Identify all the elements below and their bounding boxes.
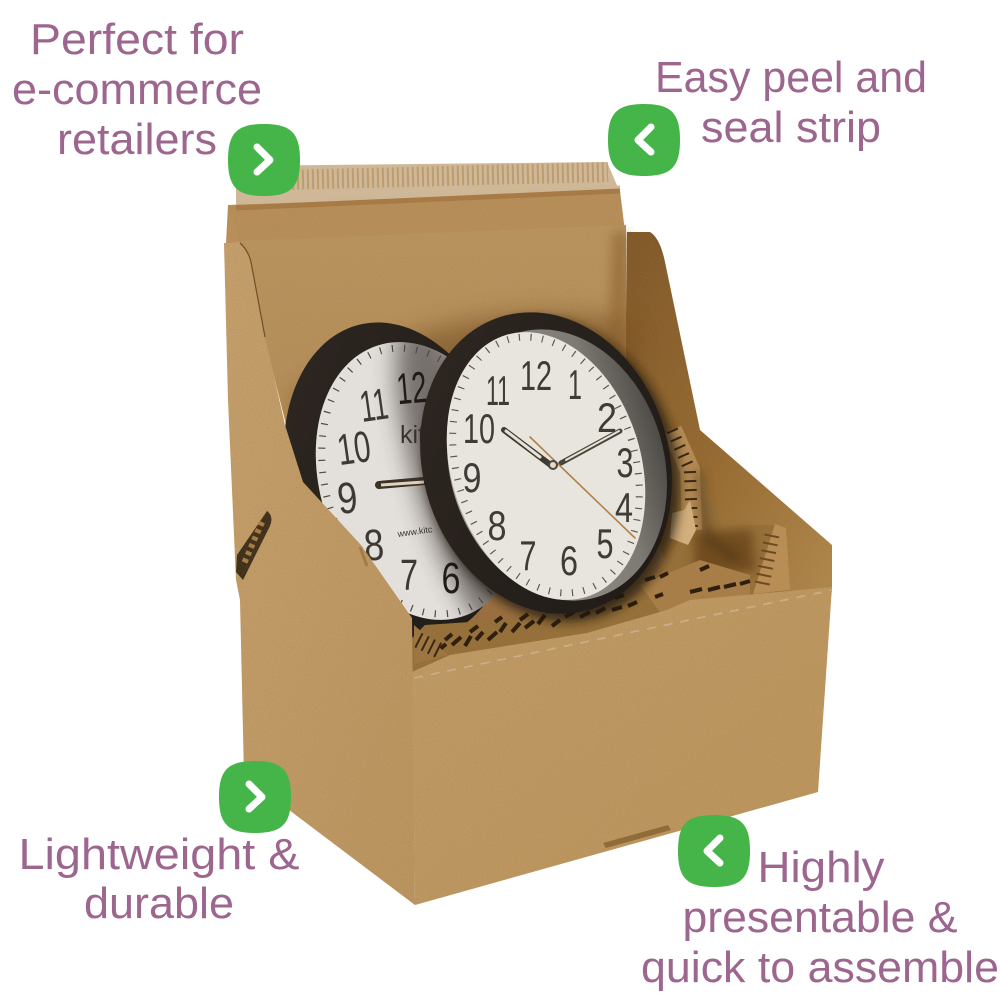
front clock numerals: 9 bbox=[462, 454, 482, 501]
back clock numerals: 10 bbox=[334, 422, 374, 475]
front clock numerals: 8 bbox=[488, 502, 506, 549]
front face bbox=[412, 587, 832, 905]
front clock numerals: 2 bbox=[597, 394, 617, 441]
back clock bbox=[285, 322, 496, 638]
right inner flap bbox=[625, 232, 832, 630]
back clock numerals: 7 bbox=[400, 551, 418, 600]
front clock numerals: 11 bbox=[486, 367, 510, 414]
front clock numerals bbox=[462, 352, 634, 584]
peel and seal strip bbox=[236, 162, 620, 210]
back clock numerals: 8 bbox=[362, 520, 386, 571]
front clock numerals: 1 bbox=[568, 361, 582, 408]
label bbox=[641, 843, 999, 992]
label bbox=[12, 15, 262, 164]
back inner panel bbox=[240, 225, 680, 640]
back clock numerals: 6 bbox=[442, 554, 460, 603]
front clock hands bbox=[504, 430, 635, 538]
front clock numerals: 12 bbox=[520, 352, 552, 399]
front clock numerals: 6 bbox=[560, 537, 578, 584]
callout: lightweight and durable bbox=[18, 761, 300, 928]
top flap bbox=[226, 191, 625, 243]
back clock numerals bbox=[334, 363, 460, 603]
front clock numerals: 3 bbox=[616, 439, 634, 486]
callout: perfect for e-commerce retailers bbox=[12, 15, 300, 196]
inner shadow behind clocks bbox=[290, 314, 640, 620]
front clock numerals: 5 bbox=[596, 520, 614, 567]
label: Perfect for bbox=[30, 15, 244, 64]
shredded paper packing bbox=[408, 428, 790, 690]
back clock numerals: www.kitc bbox=[396, 524, 433, 539]
label bbox=[655, 53, 927, 152]
paper grain overlay bbox=[229, 194, 804, 521]
front clock numerals: 7 bbox=[520, 532, 536, 579]
icon: green left chevron badge bbox=[678, 815, 750, 887]
icon: green right chevron badge bbox=[228, 124, 300, 196]
label: presentable & bbox=[682, 893, 958, 942]
label bbox=[18, 830, 300, 928]
paper grain overlay bbox=[220, 240, 840, 910]
back clock hand bbox=[379, 481, 424, 485]
callout: easy peel and seal strip bbox=[608, 53, 927, 176]
front clock numerals: 10 bbox=[463, 405, 495, 452]
icon: green left chevron badge bbox=[608, 104, 680, 176]
label: seal strip bbox=[701, 103, 881, 152]
back clock numerals: 12 bbox=[395, 363, 429, 414]
back clock numerals: 11 bbox=[357, 379, 391, 432]
label: Easy peel and bbox=[655, 53, 927, 102]
label: Highly bbox=[758, 843, 884, 892]
callout: highly presentable and quick to assemble bbox=[641, 815, 999, 992]
icon: green right chevron badge bbox=[219, 761, 291, 833]
hand slot bbox=[236, 511, 271, 580]
front clock bbox=[384, 281, 717, 654]
back clock numerals: 9 bbox=[335, 473, 360, 524]
back clock numerals: kit bbox=[400, 421, 425, 449]
label: retailers bbox=[57, 115, 217, 164]
label: quick to assemble bbox=[641, 943, 999, 992]
left side wall bbox=[224, 243, 415, 905]
bottom tab bbox=[603, 825, 671, 848]
product photo: open cardboard box with clocks bbox=[220, 160, 840, 910]
label: durable bbox=[84, 879, 234, 928]
label: Lightweight & bbox=[18, 830, 300, 879]
label: e-commerce bbox=[12, 65, 262, 114]
front clock numerals: 4 bbox=[615, 484, 633, 531]
